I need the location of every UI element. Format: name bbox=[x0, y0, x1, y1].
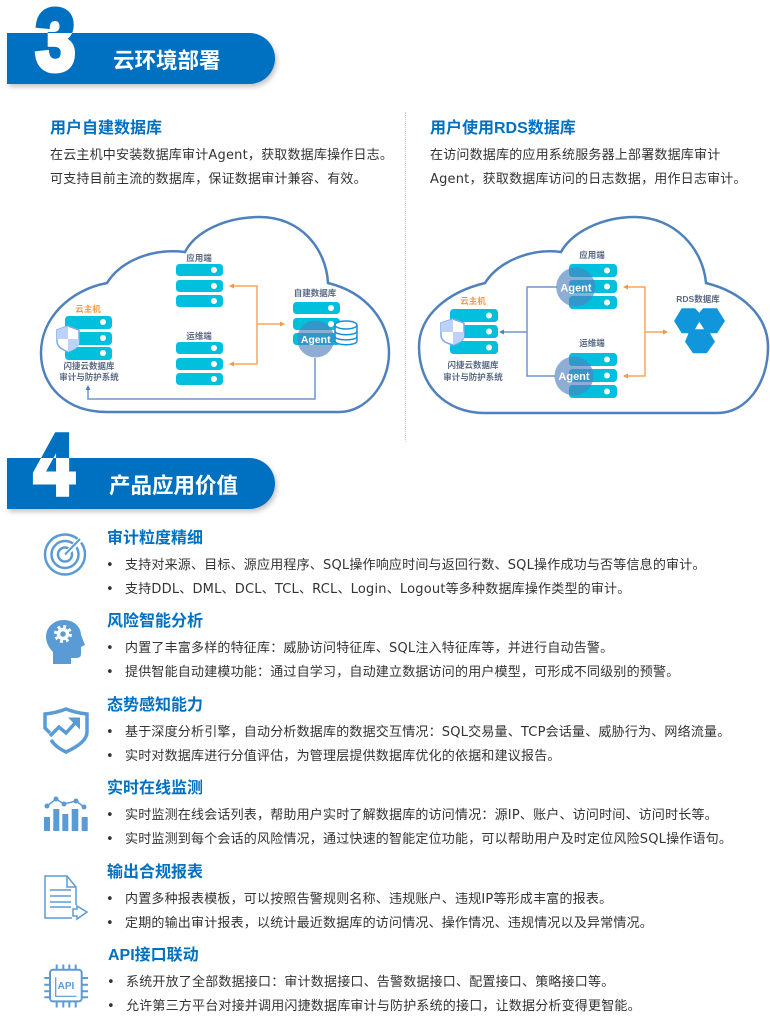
item 4 bullets bbox=[106, 808, 732, 847]
right description: Agent，获取数据库访问的日志数据，用作日志审计。 bbox=[430, 172, 747, 187]
item 4 bullets: • bbox=[106, 808, 114, 823]
icon: database bbox=[335, 321, 357, 345]
item 1 bullets: 支持对来源、目标、源应用程序、SQL操作响应时间与返回行数、SQL操作成功与否等信息的审计。 bbox=[125, 558, 706, 573]
server stack: self-built database bbox=[293, 302, 340, 345]
item 3 heading: 态势感知能力 bbox=[107, 697, 203, 714]
item 6 heading: API接口联动 bbox=[108, 947, 199, 964]
item 4 bullets: 实时监测到每个会话的风险情况，通过快速的智能定位功能，可以帮助用户及时定位风险SQL操作语句。 bbox=[125, 832, 732, 847]
left description bbox=[50, 148, 393, 187]
server stack: app side right bbox=[569, 264, 617, 309]
item 1 heading: 审计粒度精细 bbox=[107, 530, 203, 547]
item 4 bbox=[44, 779, 732, 847]
item 2 bullets bbox=[106, 640, 679, 680]
label: audit system: 闪捷云数据库 bbox=[63, 361, 115, 371]
item 3 bullets: 实时对数据库进行分值评估，为管理层提供数据库优化的依据和建议报告。 bbox=[125, 749, 561, 764]
icon: shield with trend bbox=[43, 707, 89, 754]
icon: bar chart with trend bbox=[44, 796, 88, 831]
cloud outline right bbox=[419, 217, 768, 413]
item 2 bullets: • bbox=[106, 665, 114, 680]
section 3 banner bbox=[7, 33, 275, 84]
item 5 bullets: • bbox=[106, 892, 114, 907]
item 3 bullets: 基于深度分析引擎，自动分析数据库的数据交互情况：SQL交易量、TCP会话量、威胁行为、网络流量。 bbox=[125, 725, 730, 740]
icon: shield left bbox=[57, 326, 79, 352]
item 6 bullets bbox=[107, 974, 641, 1014]
icon: target bbox=[44, 533, 86, 576]
blue connector bbox=[499, 287, 557, 376]
column divider bbox=[405, 112, 406, 442]
right description bbox=[430, 148, 747, 187]
cloud outline left bbox=[41, 217, 389, 412]
blue return arrow bbox=[86, 358, 315, 399]
item 6 bullets: 允许第三方平台对接并调用闪捷数据库审计与防护系统的接口，让数据分析变得更智能。 bbox=[126, 999, 641, 1014]
label: app side: 应用端 bbox=[186, 253, 212, 263]
item 4 bullets: • bbox=[106, 832, 114, 847]
icon: API chip: API bbox=[58, 981, 75, 992]
item 4 heading: 实时在线监测 bbox=[107, 780, 203, 797]
label: ops side right: 运维端 bbox=[579, 338, 605, 348]
icon: head with gear bbox=[46, 620, 85, 664]
item 3 bullets: • bbox=[106, 749, 114, 764]
section 4 heading: 产品应用价值 bbox=[109, 474, 238, 498]
server stack: ops side bbox=[176, 342, 223, 385]
item 4 bullets: 实时监测在线会话列表，帮助用户实时了解数据库的访问情况：源IP、账户、访问时间、访问时长等。 bbox=[125, 808, 718, 823]
left description: 可支持目前主流的数据库，保证数据审计兼容、有效。 bbox=[50, 172, 367, 187]
item 6 bullets: • bbox=[107, 999, 115, 1014]
item 6 bullets: • bbox=[107, 975, 115, 990]
item 5 bullets bbox=[106, 892, 653, 931]
item 3 bullets: • bbox=[106, 725, 114, 740]
item 1 bullets: • bbox=[106, 582, 114, 597]
label: cloud host: 云主机 bbox=[75, 304, 101, 314]
item 5 bbox=[44, 863, 653, 931]
label: ops side: 运维端 bbox=[186, 331, 212, 341]
right heading: 用户使用RDS数据库 bbox=[430, 120, 576, 137]
item 2 bullets: 内置了丰富多样的特征库：威胁访问特征库、SQL注入特征库等，并进行自动告警。 bbox=[125, 641, 613, 656]
label: audit system right: 闪捷云数据库 bbox=[447, 360, 499, 370]
label: audit system right line 2: 审计与防护系统 bbox=[443, 372, 503, 382]
label: self-built database: 自建数据库 bbox=[294, 288, 337, 298]
item 2 bullets: • bbox=[106, 641, 114, 656]
icon: API chip bbox=[44, 964, 88, 1008]
orange connector right bbox=[623, 284, 668, 378]
item 1 bbox=[44, 529, 706, 597]
agent badge ops bbox=[554, 356, 594, 396]
agent badge left: Agent bbox=[301, 334, 331, 346]
item 3 bullets bbox=[106, 724, 730, 764]
item 6 bullets: 系统开放了全部数据接口：审计数据接口、告警数据接口、配置接口、策略接口等。 bbox=[126, 975, 614, 990]
item 6 bbox=[44, 946, 641, 1014]
section 4 number bbox=[32, 432, 76, 497]
icon: shield right bbox=[441, 319, 464, 345]
right description: 在访问数据库的应用系统服务器上部署数据库审计 bbox=[430, 148, 720, 163]
section 4 banner bbox=[7, 458, 275, 509]
agent badge left bbox=[297, 320, 334, 358]
left description: 在云主机中安装数据库审计Agent，获取数据库操作日志。 bbox=[50, 148, 393, 163]
server stack: cloud host right bbox=[450, 309, 498, 354]
item 3 bbox=[43, 696, 730, 764]
icon: report document bbox=[44, 875, 88, 920]
item 5 bullets: 定期的输出审计报表，以统计最近数据库的访问情况、操作情况、违规情况以及异常情况。 bbox=[125, 916, 653, 931]
server stack: app side bbox=[176, 264, 223, 307]
item 1 bullets: 支持DDL、DML、DCL、TCL、RCL、Login、Logout等多种数据库操作类型的审计。 bbox=[125, 582, 630, 597]
item 5 bullets: 内置多种报表模板，可以按照告警规则名称、违规账户、违规IP等形成丰富的报表。 bbox=[125, 892, 612, 907]
item 2 bbox=[46, 612, 679, 680]
item 1 bullets: • bbox=[106, 558, 114, 573]
server stack: cloud host bbox=[65, 316, 112, 360]
agent badge app: Agent bbox=[560, 282, 592, 294]
item 2 bullets: 提供智能自动建模功能：通过自学习，自动建立数据访问的用户模型，可形成不同级别的预警。 bbox=[125, 665, 679, 680]
icon: RDS hexagons bbox=[674, 308, 725, 353]
section 3 heading: 云环境部署 bbox=[113, 49, 221, 73]
server stack: ops side right bbox=[569, 353, 617, 398]
label: cloud host right: 云主机 bbox=[460, 296, 486, 306]
agent badge app bbox=[556, 268, 595, 306]
item 5 bullets: • bbox=[106, 916, 114, 931]
item 5 heading: 输出合规报表 bbox=[107, 864, 203, 881]
label: RDS database: RDS数据库 bbox=[676, 294, 720, 304]
left heading: 用户自建数据库 bbox=[50, 120, 162, 137]
orange arrows bbox=[229, 284, 285, 366]
label: audit system line 2: 审计与防护系统 bbox=[59, 372, 119, 382]
agent badge ops: Agent bbox=[558, 371, 590, 383]
item 2 heading: 风险智能分析 bbox=[107, 613, 203, 630]
item 1 bullets bbox=[106, 558, 706, 597]
label: app side right: 应用端 bbox=[579, 250, 605, 260]
